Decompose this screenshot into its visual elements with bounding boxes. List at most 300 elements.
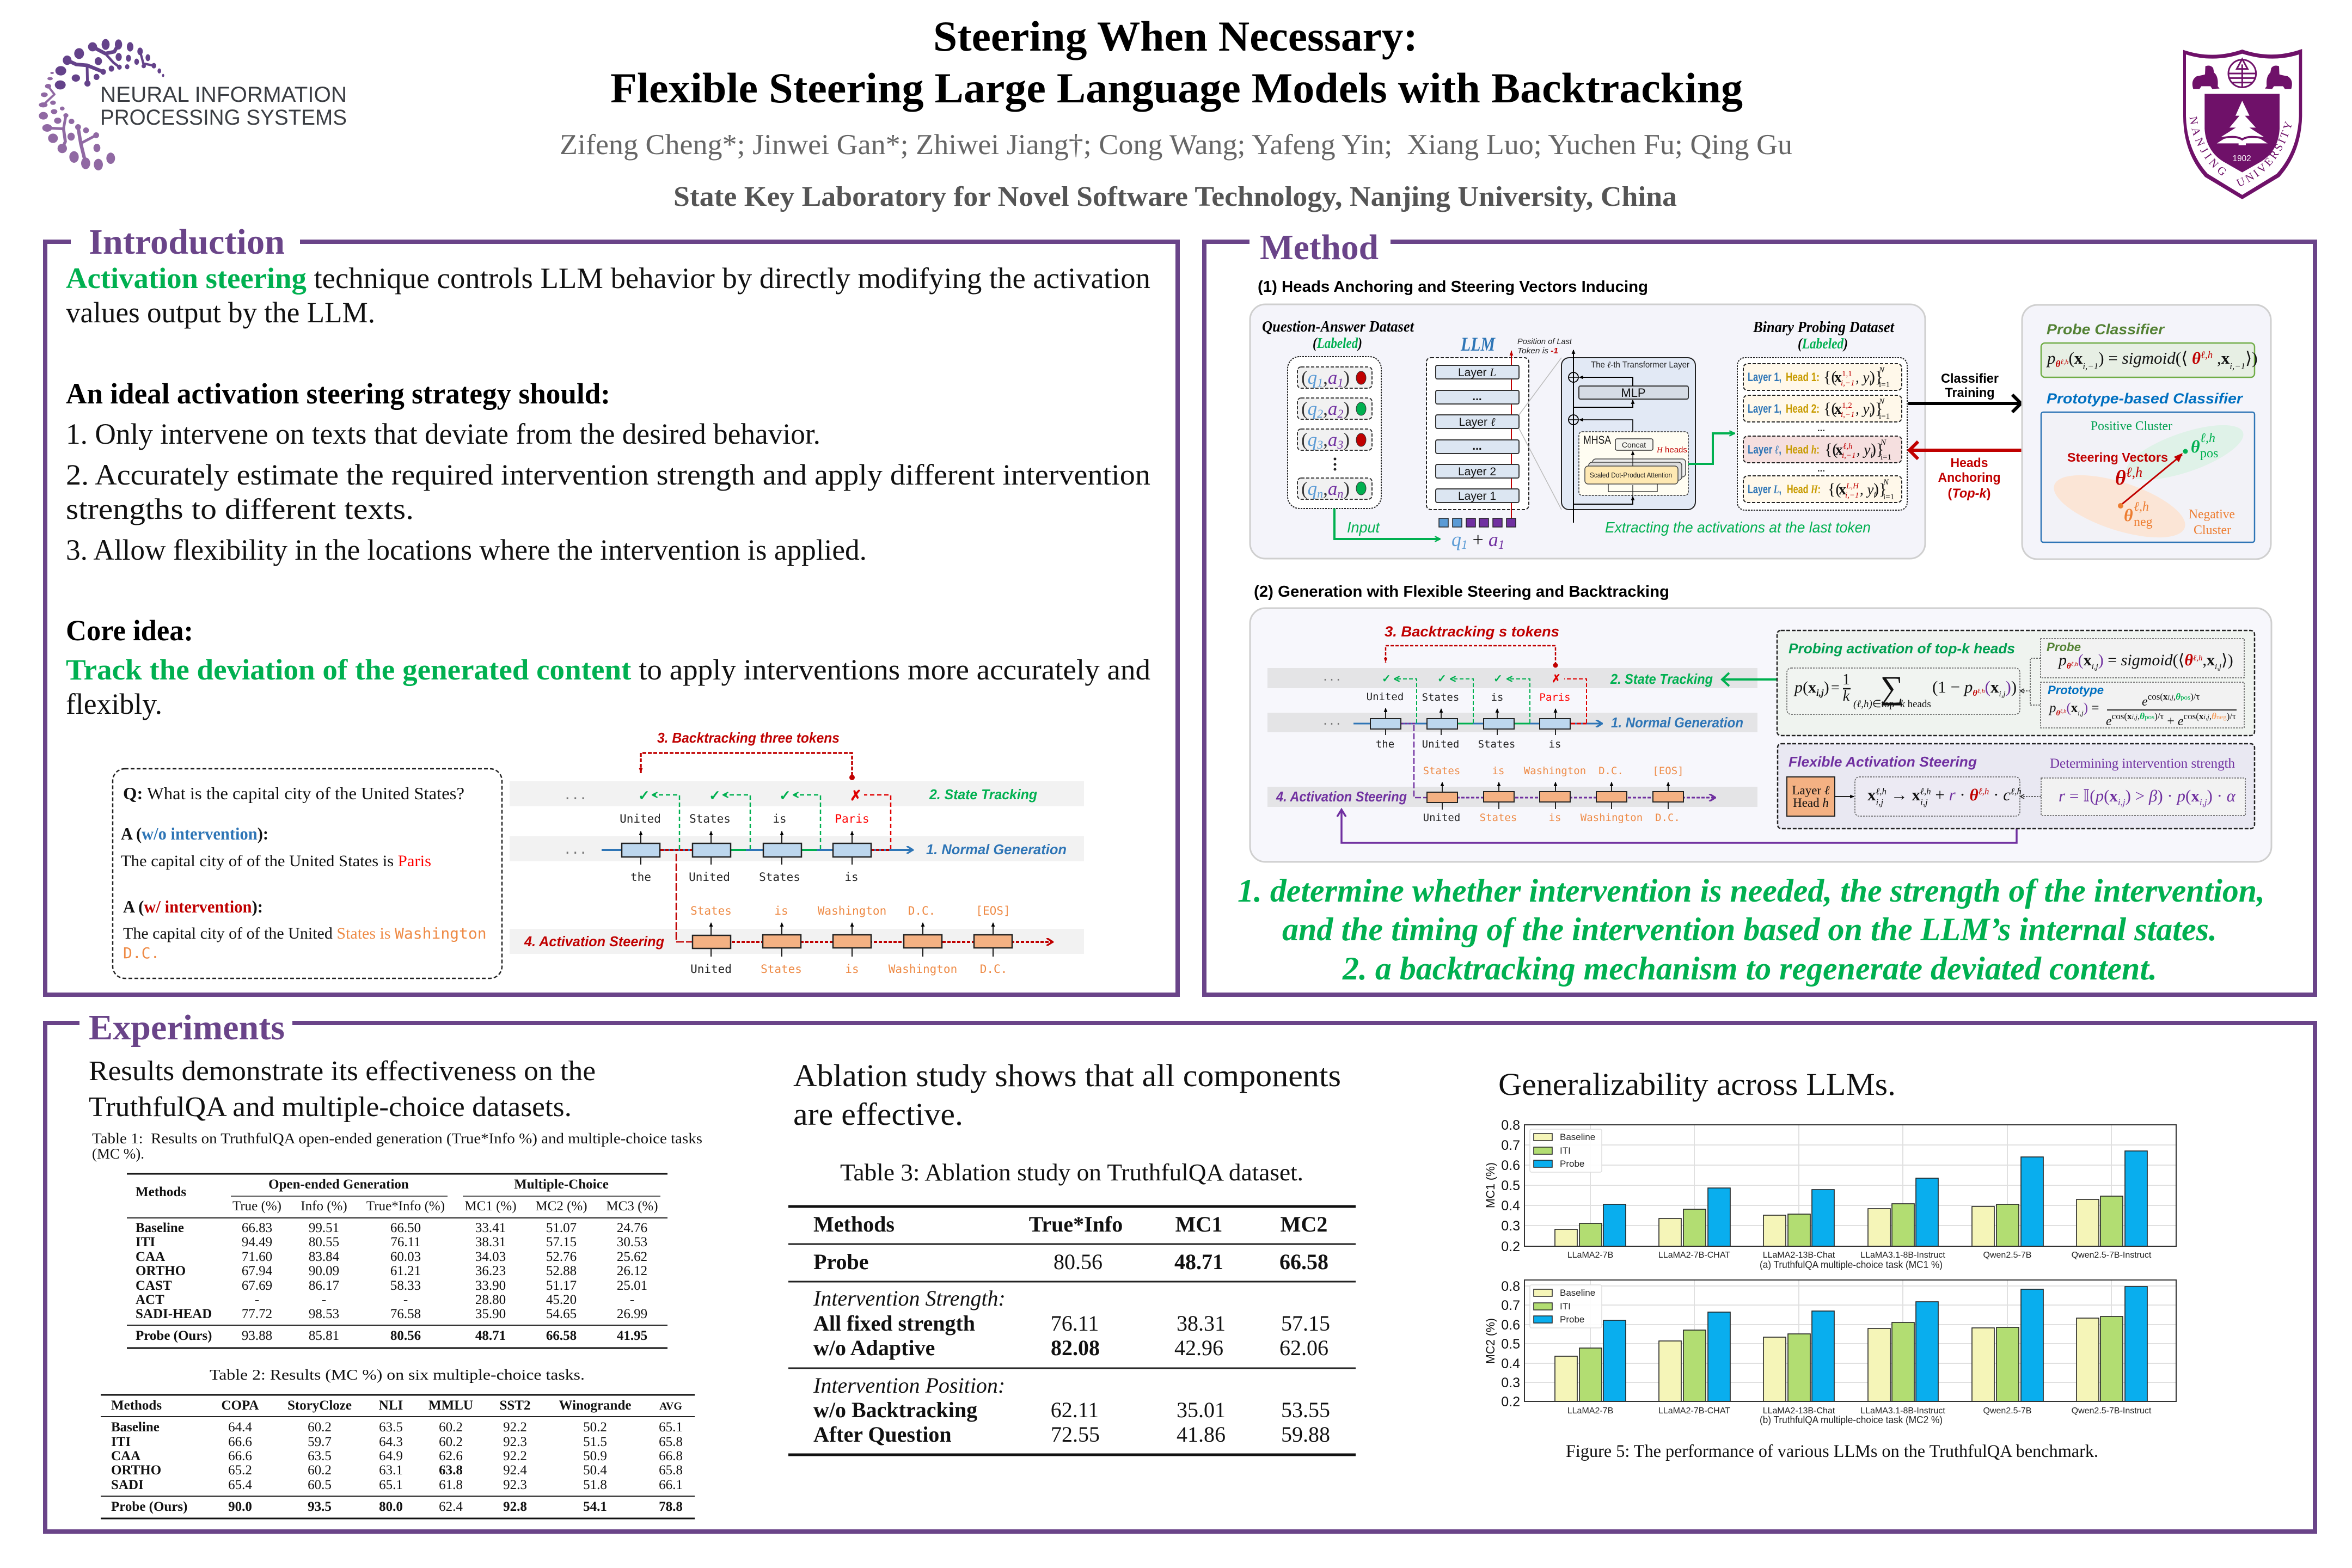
text block: ablation summary <box>793 1058 1341 1132</box>
box: probing activation of top-k heads: x <box>2071 701 2078 715</box>
panel: Method <box>1204 228 2315 995</box>
table 1: - <box>255 1293 259 1307</box>
bar chart: MC2 <box>1484 1279 2176 1425</box>
legend: Probe <box>1560 1314 1584 1325</box>
box: probing activation of top-k heads: x <box>1990 677 1999 696</box>
diagram: generation sequence: ✓ <box>1382 673 1391 685</box>
prototype-based classifier: θ <box>2115 467 2126 489</box>
diagram: backtracking example: is <box>773 812 787 825</box>
binary probing dataset: , y <box>1855 369 1869 385</box>
table 1: CAST <box>136 1278 172 1293</box>
bar chart: MC1: LLaMA2-13B-Chat <box>1763 1251 1835 1260</box>
question-answer dataset: ) <box>1343 429 1350 450</box>
table 2: SST2 <box>500 1398 530 1413</box>
binary probing dataset: 1,2 <box>1842 401 1852 410</box>
question-answer dataset: , <box>1323 478 1328 499</box>
box: probing activation of top-k heads: ℓ,h <box>1977 687 1985 695</box>
table 1: 76.11 <box>390 1235 421 1250</box>
box: probing activation of top-k heads: xi,j,θpos)/τ <box>2163 691 2200 702</box>
table 2: 50.4 <box>583 1463 607 1478</box>
box: flexible activation steering: ℓ,h <box>1979 786 1989 797</box>
table 3: w/o Backtracking <box>813 1398 977 1422</box>
table 1: 26.99 <box>617 1307 647 1321</box>
table 1: Baseline <box>136 1221 184 1235</box>
table 3: 82.08 <box>1051 1336 1100 1360</box>
box: flexible activation steering: ℓ,h <box>2011 786 2022 797</box>
text block: generalizability heading: Generalizability across LLMs. <box>1498 1067 1896 1102</box>
table 3: 66.58 <box>1279 1250 1328 1274</box>
table 3: After Question <box>813 1422 952 1447</box>
diagram: generation sequence: States <box>1478 738 1515 750</box>
panel: classifiers <box>2022 305 2271 559</box>
diagram: backtracking example: States <box>761 963 802 976</box>
bar chart: MC2: MC2 (%) <box>1484 1318 1497 1364</box>
diagram: generation sequence: ✓ <box>1493 673 1503 685</box>
question-answer dataset: ) <box>1343 478 1350 499</box>
callout: example question and answers: The capital city of of the United States is Paris <box>121 852 431 870</box>
table 1: 98.53 <box>309 1307 339 1321</box>
text block: results summary: Results demonstrate its effectiveness on the <box>89 1056 596 1087</box>
figure caption: Figure 5: The performance of various LLMs on the TruthfulQA benchmark. <box>1566 1442 2098 1461</box>
text block: core idea: Track the deviation of the generated content to apply interventions more accurately and <box>66 653 1150 686</box>
question-answer dataset: 1 <box>1337 376 1343 389</box>
table 3: All fixed strength <box>813 1311 975 1336</box>
box: probing activation of top-k heads: ) <box>1824 678 1829 696</box>
table 1: 35.90 <box>475 1307 506 1321</box>
box: probing activation of top-k heads: Probe <box>2047 640 2081 654</box>
table 1: True*Info (%) <box>366 1199 445 1214</box>
box: probing activation of top-k heads: cos( <box>2184 711 2199 721</box>
arrow: probing to state tracking <box>1722 673 1777 686</box>
probe classifier: x <box>2074 348 2083 367</box>
legend: Baseline <box>1560 1288 1595 1298</box>
table 1: 77.72 <box>242 1307 272 1321</box>
logo: Nanjing University crest: NANJING <box>2190 117 2226 175</box>
transformer layer detail: The ℓ-th Transformer Layer <box>1591 360 1690 370</box>
box: probing activation of top-k heads: x <box>2207 651 2215 669</box>
heading: Introduction: Introduction <box>89 222 285 262</box>
input arrow: 1 <box>1498 538 1504 552</box>
table 2: Methods <box>111 1398 162 1413</box>
binary probing dataset: Head H: <box>1787 482 1821 496</box>
bar chart: MC1: 0.5 <box>1501 1178 1520 1193</box>
box: probing activation of top-k heads <box>1777 630 2255 736</box>
probe classifier: ℓ,h <box>2060 358 2069 366</box>
text block: activation steering definition: values output by the LLM. <box>66 296 375 329</box>
table 1: 30.53 <box>617 1235 647 1250</box>
table 3: Probe <box>813 1250 868 1274</box>
question-answer dataset: 2 <box>1317 407 1323 420</box>
transformer layer detail: MLP <box>1621 386 1646 400</box>
table 1: 67.94 <box>242 1264 273 1278</box>
table 2: ORTHO <box>111 1463 161 1478</box>
table 1: ORTHO <box>136 1264 186 1278</box>
input arrow: a <box>1489 529 1498 550</box>
table 1: 60.03 <box>390 1250 421 1264</box>
text block: method summary: and the timing of the intervention based on the LLM’s internal states. <box>1282 911 2217 947</box>
bar chart: MC1: Qwen2.5-7B <box>1983 1251 2031 1260</box>
binary probing dataset: ... <box>1817 423 1825 433</box>
title: Flexible Steering Large Language Models with Backtracking <box>610 64 1743 112</box>
table 3: w/o Adaptive <box>813 1336 935 1360</box>
box: flexible activation steering: Determining intervention strength <box>2050 756 2235 771</box>
table 1: CAA <box>136 1250 165 1264</box>
box: probing activation of top-k heads: xi,j,θpos)/τ <box>2127 711 2164 721</box>
table 1: 83.84 <box>309 1250 340 1264</box>
table 2: 64.9 <box>379 1449 403 1463</box>
diagram: generation sequence: 1. Normal Generation <box>1611 714 1743 731</box>
bar chart: MC2: Qwen2.5-7B-Instruct <box>2072 1406 2152 1416</box>
legend <box>1530 1285 1602 1328</box>
box: flexible activation steering: → <box>1886 785 1912 804</box>
box: probing activation of top-k heads: i,j <box>2078 709 2084 717</box>
box: probing activation of top-k heads: k <box>1843 688 1850 705</box>
diagram: backtracking example: 3. Backtracking three tokens <box>657 730 840 746</box>
diagram: generation sequence: is <box>1492 765 1504 777</box>
table 1: Info (%) <box>301 1199 347 1214</box>
table 1: Probe (Ours) <box>136 1328 212 1343</box>
box: probing activation of top-k heads: ( <box>2078 651 2084 669</box>
table 2: 65.8 <box>659 1435 683 1449</box>
callout: example question and answers: Q: What is the capital city of the United States? <box>123 783 464 803</box>
table 1: 85.81 <box>309 1328 339 1343</box>
diagram: generation sequence: D.C. <box>1598 765 1624 777</box>
prototype-based classifier: ℓ,h <box>2126 464 2142 480</box>
table 2: 78.8 <box>659 1499 683 1514</box>
table 1: 80.55 <box>309 1235 339 1250</box>
table 1: 67.69 <box>242 1278 272 1293</box>
panel: Introduction <box>45 222 1178 995</box>
question-answer dataset: , <box>1323 367 1328 388</box>
box: flexible activation steering: · <box>1989 785 2003 804</box>
box: probing activation of top-k heads: Probing activation of top-k heads <box>1788 640 2015 657</box>
bar chart: MC1: 0.4 <box>1501 1198 1520 1214</box>
table 3: 53.55 <box>1281 1398 1330 1422</box>
diagram: backtracking example: D.C. <box>908 904 935 917</box>
table 3: Methods <box>813 1212 895 1236</box>
bar chart: MC1: 0.3 <box>1501 1218 1520 1234</box>
table 1: SADI-HEAD <box>136 1307 212 1321</box>
question-answer dataset: , <box>1323 429 1328 450</box>
bar chart: MC2: 0.6 <box>1501 1318 1520 1333</box>
input arrow <box>1334 509 1504 552</box>
diagram: backtracking example: [EOS] <box>976 904 1010 917</box>
table 1: 66.58 <box>546 1328 577 1343</box>
bar chart: MC2: 0.3 <box>1501 1375 1520 1391</box>
binary probing dataset: i <box>1869 410 1872 419</box>
callout: example question and answers: A (w/ intervention): <box>123 897 263 916</box>
box: probing activation of top-k heads: cos( <box>2148 691 2163 702</box>
diagram: backtracking example: ✓ <box>638 787 650 804</box>
table 1: 86.17 <box>309 1278 339 1293</box>
prototype-based classifier: neg <box>2134 515 2153 529</box>
title: Steering When Necessary: <box>933 13 1418 60</box>
diagram: generation sequence: States <box>1423 765 1460 777</box>
diagram: generation sequence: ... <box>1322 670 1342 683</box>
table 3: Table 3: Ablation study on TruthfulQA dataset. <box>840 1159 1303 1186</box>
diagram: generation sequence: is <box>1491 691 1503 703</box>
table 3: 41.86 <box>1177 1422 1226 1447</box>
text block: core idea: flexibly. <box>66 688 162 720</box>
diagram: generation sequence: is <box>1549 812 1561 824</box>
LLM layer stack: Layer 1 <box>1458 490 1496 503</box>
table 1: MC1 (%) <box>464 1199 517 1214</box>
box: probing activation of top-k heads: ) <box>2084 701 2088 715</box>
table 2: SADI <box>111 1478 144 1492</box>
table 1: Multiple-Choice <box>514 1177 609 1192</box>
table 3: 72.55 <box>1051 1422 1100 1447</box>
question-answer dataset: a <box>1328 429 1337 450</box>
table 2: 60.2 <box>439 1435 463 1449</box>
question-answer dataset: 3 <box>1316 438 1323 451</box>
LLM layer stack: Position of Last <box>1517 337 1572 346</box>
table 1: 28.80 <box>475 1293 506 1307</box>
transformer layer detail: MHSA <box>1583 434 1611 446</box>
diagram: backtracking example: States <box>690 904 732 917</box>
LLM layer stack: Layer L <box>1458 366 1496 379</box>
question-answer dataset: ) <box>1343 367 1350 388</box>
binary probing dataset: i <box>1869 378 1872 387</box>
diagram: backtracking example: ✓ <box>779 787 791 804</box>
text block: ideal strategy: An ideal activation steering strategy should: <box>66 377 610 410</box>
box: probing activation of top-k heads: p <box>2057 651 2067 669</box>
table 1: Open-ended Generation <box>268 1177 409 1192</box>
diagram: generation sequence <box>1267 623 1757 824</box>
question-answer dataset: 1 <box>1317 376 1323 389</box>
table 2: NLI <box>379 1398 403 1413</box>
table 1: Table 1: Results on TruthfulQA open-ended generation (True*Info %) and multiple-choice tasks <box>92 1130 702 1147</box>
table 2: COPA <box>222 1398 259 1413</box>
table 3: Intervention Position: <box>813 1373 1005 1398</box>
table 2: 51.8 <box>583 1478 607 1492</box>
question-answer dataset: (q <box>1301 398 1317 419</box>
table 2: 64.4 <box>228 1420 252 1435</box>
box: flexible activation steering: ) > <box>2126 786 2149 805</box>
table 2: 92.3 <box>503 1478 527 1492</box>
box: probing activation of top-k heads: (ℓ,h)∈top−k heads <box>1853 699 1931 710</box>
text block: core idea <box>66 614 1150 720</box>
box: flexible activation steering: c <box>2003 785 2011 804</box>
table 3: 57.15 <box>1281 1311 1330 1336</box>
box: probing activation of top-k heads: e <box>2106 714 2112 728</box>
transformer layer detail: Scaled Dot-Product Attention <box>1590 471 1672 479</box>
text block: ideal strategy <box>66 377 1150 566</box>
diagram: backtracking example: 4. Activation Steering <box>524 933 664 950</box>
box: flexible activation steering: i,j <box>2118 797 2126 807</box>
question-answer dataset: n <box>1317 487 1323 500</box>
probe classifier: i,−1 <box>2230 361 2245 371</box>
panel: Experiments <box>45 1008 2315 1532</box>
table 2: 63.1 <box>379 1463 403 1478</box>
affiliation: State Key Laboratory for Novel Software Technology, Nanjing University, China <box>673 181 1677 212</box>
table 1: 80.56 <box>390 1328 421 1343</box>
callout: example question and answers <box>113 769 502 978</box>
bar chart: MC1: (a) TruthfulQA multiple-choice task (MC1 %) <box>1760 1259 1943 1270</box>
question-answer dataset: (q <box>1301 478 1317 499</box>
table 2: 64.3 <box>379 1435 403 1449</box>
box: probing activation of top-k heads: = <box>1831 679 1840 696</box>
arrow: heads anchoring: Anchoring <box>1938 470 2000 485</box>
arrow: classifier training: Training <box>1945 385 1995 400</box>
bar chart: MC1: LLaMA2-7B <box>1567 1251 1613 1260</box>
box: flexible activation steering: ℓ,h <box>1920 786 1931 797</box>
callout: example question and answers: The capital city of of the United States is Washington <box>123 924 487 942</box>
table 1: - <box>630 1293 634 1307</box>
box: flexible activation steering: ) · <box>2207 786 2227 805</box>
diagram: backtracking example: United <box>690 963 732 976</box>
input arrow: 1 <box>1461 538 1468 552</box>
prototype-based classifier: pos <box>2200 446 2218 461</box>
arrow: steering feedback <box>1337 810 2017 843</box>
binary probing dataset: {( <box>1828 480 1841 498</box>
text block: method summary: 2. a backtracking mechanism to regenerate deviated content. <box>1342 951 2157 987</box>
table 3: 42.96 <box>1174 1336 1223 1360</box>
table 2: MMLU <box>428 1398 473 1413</box>
binary probing dataset: N <box>1878 397 1885 406</box>
table 2: 92.8 <box>503 1499 527 1514</box>
binary probing dataset: i,−1 <box>1845 491 1859 500</box>
box: probing activation of top-k heads: ℓ,h <box>2060 708 2066 714</box>
logo: Nanjing University crest <box>2183 49 2302 199</box>
diagram: backtracking example: the <box>630 871 651 884</box>
binary probing dataset: ... <box>1817 463 1825 474</box>
logo: Nanjing University crest: 1902 <box>2233 154 2251 163</box>
binary probing dataset: N <box>1883 478 1889 487</box>
LLM layer stack: Token is -1 <box>1517 346 1558 356</box>
box: probing activation of top-k heads: ⟩) <box>2221 651 2233 669</box>
question-answer dataset: a <box>1328 367 1337 388</box>
bar chart: MC2: LLaMA3.1-8B-Instruct <box>1860 1406 1945 1416</box>
box: probing activation of top-k heads: ℓ,h <box>2071 661 2078 667</box>
diagram: generation sequence: United <box>1367 691 1404 703</box>
table 2: 63.8 <box>439 1463 463 1478</box>
diagram: generation sequence: is <box>1549 738 1561 750</box>
text block: ablation summary: Ablation study shows that all components <box>793 1058 1341 1093</box>
binary probing dataset: i,−1 <box>1842 451 1856 460</box>
binary probing dataset: , y <box>1857 442 1870 458</box>
binary probing dataset: i,−1 <box>1841 379 1855 388</box>
binary probing dataset: x <box>1834 369 1842 386</box>
diagram: backtracking example: ✓ <box>709 787 721 804</box>
table 2: 92.2 <box>503 1420 527 1435</box>
table 1: 26.12 <box>617 1264 647 1278</box>
table 2: 54.1 <box>583 1499 607 1514</box>
table 1: 93.88 <box>242 1328 272 1343</box>
table 2: 65.4 <box>228 1478 252 1492</box>
table 3: Intervention Strength: <box>813 1286 1006 1310</box>
box: probing activation of top-k heads: i,j <box>1999 690 2006 699</box>
table 3: 48.71 <box>1174 1250 1223 1274</box>
table 2: 66.6 <box>228 1449 252 1463</box>
input arrow: q <box>1451 529 1461 550</box>
input arrow: + <box>1468 529 1489 550</box>
box: probing activation of top-k heads: xi,j,θneg)/τ <box>2199 711 2236 721</box>
arrow: heads anchoring: Heads <box>1950 456 1988 470</box>
table 2: Probe (Ours) <box>111 1499 187 1514</box>
table 1: 58.33 <box>390 1278 421 1293</box>
table 1: 34.03 <box>475 1250 506 1264</box>
arrow: heads anchoring: (Top-k) <box>1948 486 1990 501</box>
arrow: classifier training <box>1908 371 2021 412</box>
box: flexible activation steering: r · θ <box>1949 785 1979 804</box>
box: flexible activation steering: i,j <box>2200 797 2207 807</box>
diagram: backtracking example: ... <box>564 787 587 803</box>
prototype-based classifier: Steering Vectors <box>2067 450 2168 464</box>
text block: method summary: 1. determine whether intervention is needed, the strength of the intervention, <box>1238 873 2265 909</box>
callout: example question and answers: A (w/o intervention): <box>121 824 268 843</box>
table 2: 90.0 <box>228 1499 252 1514</box>
diagram: generation sequence: 2. State Tracking <box>1610 671 1713 687</box>
probe classifier: ⟩) <box>2245 348 2258 367</box>
table 3: 38.31 <box>1177 1311 1226 1336</box>
box: flexible activation steering: Layer ℓ <box>1792 783 1830 797</box>
table 1: ACT <box>136 1293 164 1307</box>
box: probing activation of top-k heads: = <box>2091 701 2099 715</box>
diagram: generation sequence: ... <box>1322 714 1342 727</box>
binary probing dataset: i=1 <box>1881 453 1891 462</box>
table 2: 50.2 <box>583 1420 607 1435</box>
binary probing dataset: N <box>1880 438 1886 447</box>
table 1: 36.23 <box>475 1264 506 1278</box>
binary probing dataset: Layer 1, <box>1748 402 1781 415</box>
question-answer dataset: a <box>1328 398 1337 419</box>
box: flexible activation steering: r = 𝕀(p(x <box>2059 786 2118 805</box>
text block: ideal strategy: 3. Allow flexibility in the locations where the intervention is applied. <box>66 534 867 566</box>
box: probing activation of top-k heads: ( <box>1985 677 1990 696</box>
table 2: 60.2 <box>308 1463 332 1478</box>
binary probing dataset: L,H <box>1846 482 1859 491</box>
question-answer dataset: 3 <box>1337 438 1343 451</box>
table 2: 66.1 <box>659 1478 683 1492</box>
binary probing dataset: )} <box>1870 368 1883 386</box>
table 2: 92.2 <box>503 1449 527 1463</box>
transformer layer detail <box>1519 350 1695 523</box>
binary probing dataset: , y <box>1855 401 1869 417</box>
table 2 <box>101 1367 695 1518</box>
bar chart: MC1: LLaMA2-7B-CHAT <box>1658 1251 1730 1260</box>
binary probing dataset: {( <box>1823 400 1836 418</box>
LLM layer stack: ... <box>1472 440 1482 452</box>
box: flexible activation steering: ℓ,h <box>1876 786 1886 797</box>
bar chart: MC2: 0.7 <box>1501 1298 1520 1313</box>
table 2: 65.8 <box>659 1463 683 1478</box>
box: probing activation of top-k heads: p <box>2048 701 2056 715</box>
box: probing activation of top-k heads: e <box>2178 714 2184 728</box>
box: probing activation of top-k heads: ) <box>2011 677 2017 696</box>
box: probing activation of top-k heads: + <box>2164 714 2178 728</box>
prototype-based classifier: Prototype-based Classifier <box>2047 390 2244 407</box>
diagram: generation sequence: Washington <box>1524 765 1586 777</box>
table 1: 33.41 <box>475 1221 506 1235</box>
table 2: 60.2 <box>308 1420 332 1435</box>
table 2: 61.8 <box>439 1478 463 1492</box>
table 1: 41.95 <box>617 1328 647 1343</box>
prototype-based classifier: Cluster <box>2194 523 2231 537</box>
table 3: 62.11 <box>1051 1398 1099 1422</box>
subheading: part 1: (1) Heads Anchoring and Steering Vectors Inducing <box>1258 278 1648 296</box>
diagram: backtracking example: Washington <box>889 963 957 976</box>
table 2: 65.1 <box>659 1420 683 1435</box>
binary probing dataset: Layer 1, <box>1748 370 1781 384</box>
box: probing activation of top-k heads: Prototype <box>2048 683 2104 697</box>
LLM layer stack: ... <box>1472 390 1482 403</box>
table 2: CAA <box>111 1449 140 1463</box>
table 3: 59.88 <box>1281 1422 1330 1447</box>
table 1: ITI <box>136 1235 155 1250</box>
binary probing dataset: ℓ,h <box>1843 442 1852 451</box>
table 3 <box>788 1159 1356 1455</box>
table 2: 62.6 <box>439 1449 463 1463</box>
